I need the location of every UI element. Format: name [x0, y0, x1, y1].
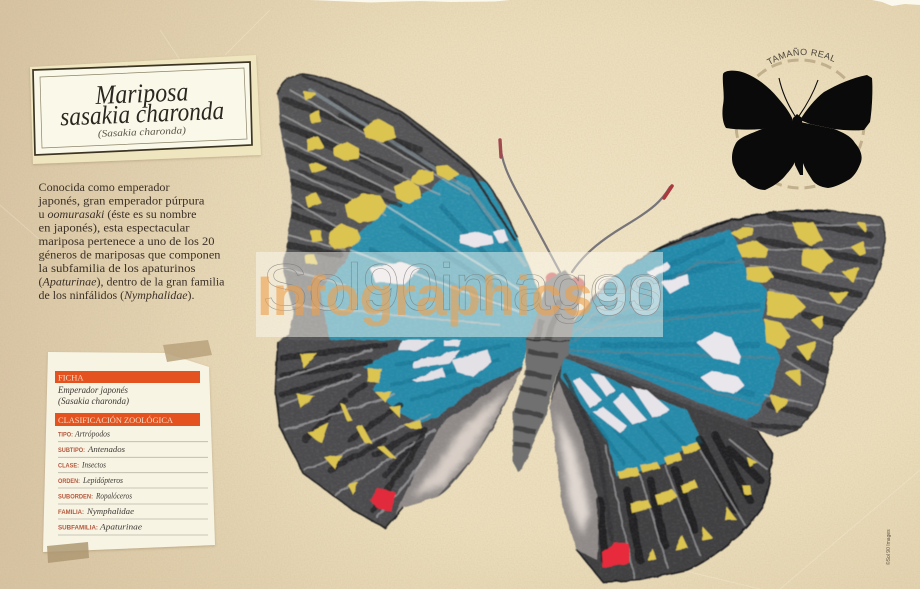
title text: Mariposa — [94, 76, 189, 110]
classification rows: Artrópodos — [74, 428, 111, 438]
intro paragraph — [37, 180, 225, 302]
red spot — [602, 543, 630, 568]
black butterfly — [722, 71, 872, 190]
common name: Emperador japonés — [57, 385, 128, 395]
watermark overlay: Infographics — [257, 264, 593, 327]
real size label: TAMAÑO REAL — [766, 48, 834, 64]
red spot — [370, 488, 395, 512]
spots — [297, 353, 422, 495]
classification header — [55, 413, 200, 426]
watermark overlay: 90 — [593, 264, 663, 327]
classification rows: CLASE: — [58, 462, 79, 470]
dark and light streaks — [282, 76, 525, 325]
tape bottom — [47, 542, 89, 563]
classification rows: ORDEN: — [58, 478, 80, 485]
classification rows: Insectos — [81, 460, 107, 470]
dark and light streaks — [560, 211, 880, 428]
classification rows — [58, 428, 208, 535]
butterfly illustration — [270, 70, 890, 585]
ficha header — [55, 371, 200, 383]
tan inner margin — [395, 370, 522, 515]
intro paragraph: u oomurasaki (éste es su nombre — [38, 207, 196, 221]
data sheet note — [43, 340, 215, 563]
classification rows: SUBTIPO: — [58, 447, 85, 454]
intro paragraph: géneros de mariposas que componen — [38, 248, 220, 262]
blue patch — [320, 172, 552, 340]
antennae — [500, 140, 672, 272]
title text — [59, 75, 225, 141]
classification header: CLASIFICACIÓN ZOOLÓGICA — [58, 415, 174, 425]
ficha header: FICHA — [58, 372, 84, 382]
right hindwing — [545, 345, 780, 585]
butterfly body — [513, 270, 584, 471]
classification rows: Apaturinae — [99, 522, 142, 532]
blue patch — [560, 355, 703, 477]
yellow marks — [618, 442, 757, 560]
yellow spots — [732, 223, 865, 412]
classification rows: Antenados — [87, 444, 126, 454]
title text: (Sasakia charonda) — [98, 125, 187, 140]
classification rows: Nymphalidae — [86, 506, 134, 516]
streaks — [565, 375, 768, 580]
intro paragraph: (Apaturinae), dentro de la gran familia — [38, 275, 225, 289]
title text: sasakia charonda — [60, 96, 225, 131]
intro paragraph: de los ninfálidos (Nymphalidae). — [38, 288, 194, 302]
blue patch — [363, 335, 532, 423]
real size silhouette — [722, 48, 872, 190]
classification rows: SUBFAMILIA: — [58, 524, 98, 532]
image credit: ©Sol 90 Images — [885, 529, 892, 565]
title card — [30, 55, 261, 164]
left hindwing — [274, 334, 527, 530]
note paper — [43, 352, 215, 552]
dashed circle — [736, 60, 864, 188]
streaks — [278, 345, 435, 517]
classification rows: SUBORDEN: — [58, 494, 93, 500]
intro paragraph: Conocida como emperador — [38, 180, 170, 194]
tape top — [163, 340, 212, 362]
right forewing — [555, 205, 890, 440]
intro paragraph: japonés, gran emperador púrpura — [37, 194, 205, 208]
classification rows: Lepidópteros — [82, 475, 124, 485]
common name — [57, 385, 129, 406]
white spots — [648, 263, 743, 393]
classification rows: TIPO: — [58, 432, 73, 438]
intro paragraph: la subfamilia de los apaturinos — [38, 261, 196, 275]
intro paragraph: mariposa pertenece a uno de los 20 — [38, 234, 214, 248]
blue patch — [560, 230, 780, 420]
classification rows: Ropalóceros — [95, 490, 133, 500]
intro paragraph: en japonés), esta espectacular — [38, 221, 190, 235]
watermark overlay: Sol90images — [262, 250, 662, 324]
white cells — [572, 373, 670, 433]
classification rows: FAMILIA: — [58, 509, 84, 516]
spots — [304, 92, 458, 263]
tan inner margin — [550, 380, 600, 560]
common name: (Sasakia charonda) — [58, 396, 129, 406]
left forewing — [270, 70, 560, 342]
